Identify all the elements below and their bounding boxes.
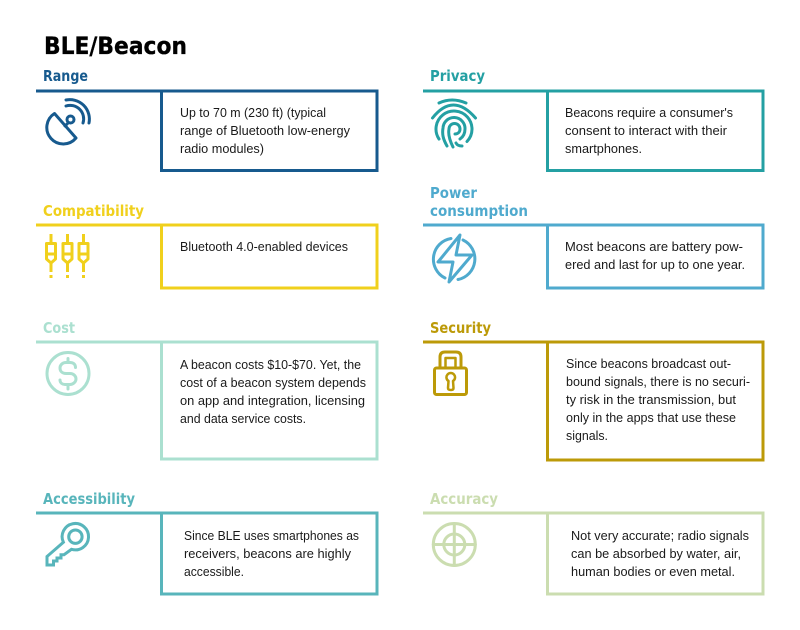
panel: cost: [36, 319, 377, 459]
panel: accessibility: [36, 490, 377, 594]
icon: target: [433, 524, 475, 566]
heading: security: Security: [430, 319, 491, 337]
text: cost: on app and integration, licensing: [180, 393, 365, 408]
heading: power consumption: [430, 184, 528, 220]
text: range: Up to 70 m (230 ft) (typical: [180, 105, 326, 120]
text: accessibility: receivers, beacons are highly: [184, 546, 352, 561]
text: accuracy: can be absorbed by water, air,: [571, 546, 741, 561]
text: power consumption: ered and last for up to one year.: [565, 257, 745, 272]
text: accessibility: Since BLE uses smartphones as: [184, 528, 359, 543]
frame: range: [36, 91, 377, 170]
heading: range: Range: [43, 67, 88, 85]
heading: power consumption: Power: [430, 184, 478, 202]
text: power consumption: [565, 239, 745, 272]
text: security: only in the apps that use these: [566, 410, 736, 425]
frame: privacy: [423, 91, 763, 170]
icon: padlock: [434, 352, 466, 394]
text: privacy: Beacons require a consumer's: [565, 105, 733, 120]
heading: cost: Cost: [43, 319, 75, 337]
text: cost: and data service costs.: [180, 411, 306, 426]
text: security: ty risk in the transmission, but: [566, 392, 736, 407]
text: privacy: [565, 105, 733, 156]
heading: accessibility: Accessibility: [43, 490, 135, 508]
frame: accuracy: [423, 513, 763, 594]
icon: satellite dish: [47, 100, 89, 144]
text: range: range of Bluetooth low-energy: [180, 123, 351, 138]
panel: privacy: [423, 67, 763, 170]
text: security: Since beacons broadcast out-: [566, 356, 731, 371]
text: cost: [180, 357, 366, 426]
panel: accuracy: [423, 490, 763, 594]
panel: compatibility: [36, 202, 377, 288]
heading: compatibility: Compatibility: [43, 202, 144, 220]
text: accessibility: [184, 528, 359, 579]
icon: lightning bolt: [433, 235, 475, 282]
title: BLE/Beacon: [44, 32, 187, 60]
frame: compatibility: [36, 225, 377, 288]
frame: cost: [36, 342, 377, 459]
text: accuracy: [571, 528, 749, 579]
text: compatibility: Bluetooth 4.0-enabled devices: [180, 239, 348, 254]
text: security: [566, 356, 750, 443]
text: accessibility: accessible.: [184, 564, 244, 579]
frame: power consumption: [423, 225, 763, 288]
text: power consumption: Most beacons are battery pow-: [565, 239, 743, 254]
frame: security: [423, 342, 763, 460]
text: range: [180, 105, 351, 156]
heading: privacy: Privacy: [430, 67, 485, 85]
icon: dollar coin: [47, 352, 89, 394]
text: accuracy: Not very accurate; radio signals: [571, 528, 749, 543]
frame: accessibility: [36, 513, 377, 594]
text: range: radio modules): [180, 141, 264, 156]
text: security: signals.: [566, 428, 608, 443]
icon: fingerprint: [432, 100, 476, 147]
text: privacy: consent to interact with their: [565, 123, 728, 138]
text: accuracy: human bodies or even metal.: [571, 564, 735, 579]
text: security: bound signals, there is no securi-: [566, 374, 750, 389]
panel: power consumption: [423, 184, 763, 288]
heading: accuracy: Accuracy: [430, 490, 498, 508]
text: cost: A beacon costs $10-$70. Yet, the: [180, 357, 361, 372]
heading: power consumption: consumption: [430, 202, 528, 220]
panel: range: [36, 67, 377, 170]
panel: security: [423, 319, 763, 460]
text: cost: cost of a beacon system depends: [180, 375, 366, 390]
icon: audio jacks: [46, 234, 88, 278]
icon: key: [47, 523, 89, 565]
text: privacy: smartphones.: [565, 141, 642, 156]
